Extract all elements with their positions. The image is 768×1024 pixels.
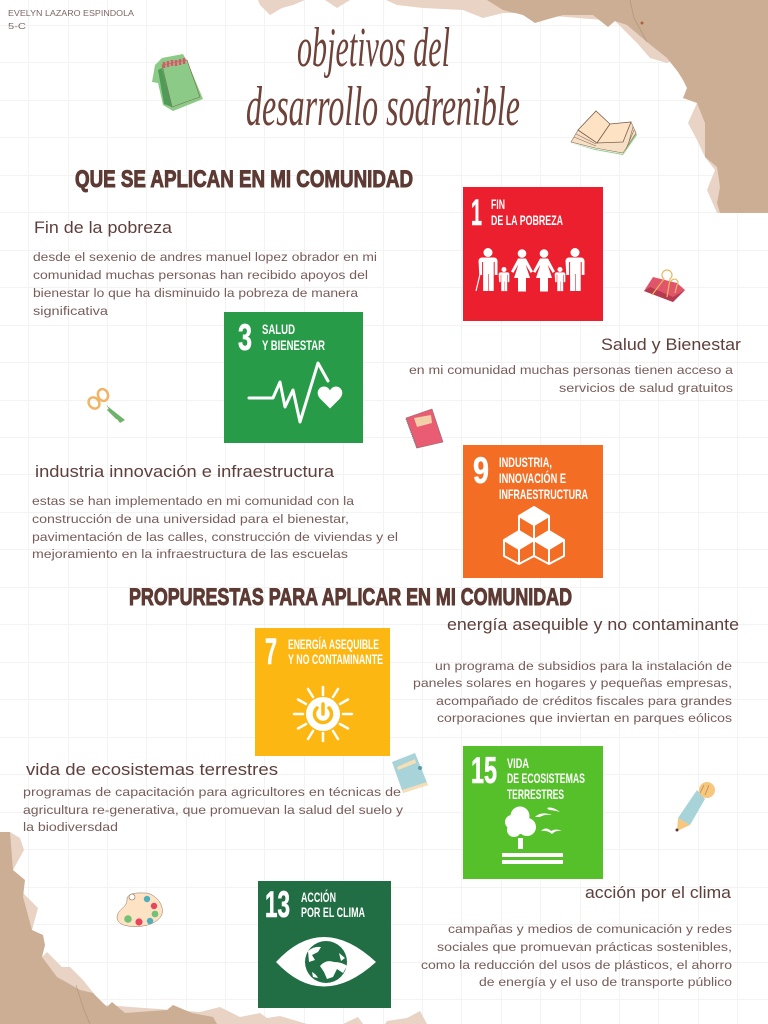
- text block: salud y bienestar: servicios de salud gratuitos: [559, 381, 733, 395]
- text block: industria: pavimentación de las calles, construcción de viviendas y el: [32, 530, 398, 544]
- author note: [8, 9, 135, 31]
- panel: SDG 3: Y BIENESTAR: [262, 337, 325, 353]
- text block: industria: estas se han implementado en mi comunidad con la: [32, 494, 354, 508]
- text block: accion por el clima: acción por el clima: [585, 884, 731, 902]
- text block: fin de la pobreza: comunidad muchas personas han recibido apoyos del: [33, 268, 368, 282]
- text block: industria: [32, 463, 398, 561]
- icon: red notebook: [406, 409, 443, 449]
- panel: SDG 1: DE LA POBREZA: [491, 212, 563, 228]
- icon: tree and birds: [502, 806, 563, 864]
- text block: accion por el clima: como la reducción del usos de plásticos, el ahorro: [421, 958, 732, 972]
- panel: SDG 15: [463, 746, 603, 879]
- panel: SDG 13: 13: [265, 884, 290, 925]
- text block: energia: paneles solares en hogares y pequeñas empresas,: [413, 676, 732, 690]
- panel: SDG 13: [258, 881, 391, 1008]
- text block: fin de la pobreza: bienestar lo que ha disminuido la pobreza de manera: [33, 286, 358, 300]
- torn paper: top right: [258, 0, 768, 213]
- text block: vida de ecosistemas: [23, 761, 404, 834]
- panel: SDG 7: Y NO CONTAMINANTE: [288, 651, 383, 667]
- panel: SDG 7: [255, 628, 390, 756]
- text block: fin de la pobreza: [33, 219, 377, 318]
- panel: SDG 7: ENERGÍA ASEQUIBLE: [288, 636, 379, 652]
- text block: fin de la pobreza: significativa: [33, 304, 108, 318]
- panel: SDG 1: [463, 187, 603, 321]
- panel: SDG 7: 7: [265, 631, 277, 672]
- icon: heartbeat: [249, 363, 342, 422]
- text block: vida de ecosistemas: agricultura re-generativa, que promuevan la salud del suelo y: [23, 803, 404, 817]
- panel: SDG 9: 9: [473, 450, 489, 491]
- panel: SDG 15: 15: [471, 750, 497, 791]
- title: objetivos del: [297, 17, 450, 79]
- text block: accion por el clima: [421, 884, 732, 989]
- text block: accion por el clima: de energía y el uso de transporte público: [479, 975, 732, 989]
- text block: industria: industria innovación e infraestructura: [35, 463, 334, 481]
- text block: salud y bienestar: en mi comunidad muchas personas tienen acceso a: [409, 363, 733, 377]
- text block: energia: corporaciones que inviertan en parques eólicos: [437, 711, 732, 725]
- panel: SDG 13: POR EL CLIMA: [301, 904, 365, 920]
- heading: propuestas: PROPURESTAS PARA APLICAR EN MI COMUNIDAD: [129, 584, 572, 611]
- panel: SDG 9: INDUSTRIA,: [499, 454, 552, 470]
- panel: SDG 9: INFRAESTRUCTURA: [499, 486, 588, 502]
- author note: EVELYN LAZARO ESPINDOLA: [8, 9, 135, 18]
- text block: energia: un programa de subsidios para la instalación de: [435, 659, 732, 673]
- panel: SDG 15: TERRESTRES: [507, 786, 564, 802]
- text block: salud y bienestar: [409, 336, 742, 395]
- text block: fin de la pobreza: Fin de la pobreza: [34, 219, 172, 237]
- title: [246, 17, 520, 138]
- text block: energia: [413, 616, 739, 725]
- panel: SDG 9: INNOVACIÓN E: [499, 469, 566, 486]
- text block: vida de ecosistemas: la biodiversdad: [23, 820, 118, 834]
- panel: SDG 15: DE ECOSISTEMAS: [507, 770, 585, 786]
- icon: open book: [571, 111, 637, 155]
- panel: SDG 3: SALUD: [262, 321, 295, 337]
- author note: 5-C: [8, 22, 26, 31]
- text block: accion por el clima: campañas y medios de comunicación y redes: [448, 922, 732, 936]
- text block: industria: construcción de una universidad para el bienestar,: [32, 512, 349, 526]
- icon: green notepad: [152, 54, 203, 111]
- icon: scissors: [86, 388, 125, 423]
- text block: vida de ecosistemas: programas de capacitación para agricultores en técnicas de: [23, 785, 401, 799]
- text block: energia: energía asequible y no contaminante: [447, 616, 739, 634]
- text block: accion por el clima: sociales que promuevan prácticas sostenibles,: [437, 940, 732, 954]
- panel: SDG 1: 1: [471, 192, 482, 233]
- icon: blue notebook: [392, 753, 428, 793]
- icon: family: [476, 248, 584, 292]
- icon: eye with globe: [276, 937, 376, 986]
- icon: binder clip: [644, 270, 685, 302]
- icon: paint palette: [117, 893, 162, 927]
- panel: SDG 3: [224, 312, 363, 443]
- heading: que se aplican: QUE SE APLICAN EN MI COMUNIDAD: [75, 166, 413, 193]
- panel: SDG 1: FIN: [491, 196, 505, 212]
- text block: industria: mejoramiento en la infraestructura de las escuelas: [32, 547, 348, 561]
- icon: cubes: [504, 507, 564, 564]
- panel: SDG 15: VIDA: [507, 755, 529, 771]
- icon: pencil: [676, 782, 715, 832]
- text block: energia: acompañado de créditos fiscales para grandes: [436, 694, 732, 708]
- icon: sun with power symbol: [294, 687, 352, 741]
- text block: salud y bienestar: Salud y Bienestar: [601, 336, 742, 354]
- panel: SDG 13: ACCIÓN: [301, 888, 336, 905]
- panel: SDG 3: 3: [238, 317, 252, 358]
- text block: vida de ecosistemas: vida de ecosistemas terrestres: [26, 761, 278, 779]
- torn paper: bottom left: [0, 832, 427, 1024]
- title: desarrollo sodrenible: [246, 76, 520, 138]
- text block: fin de la pobreza: desde el sexenio de andres manuel lopez obrador en mi: [33, 250, 377, 264]
- panel: SDG 9: [463, 445, 603, 578]
